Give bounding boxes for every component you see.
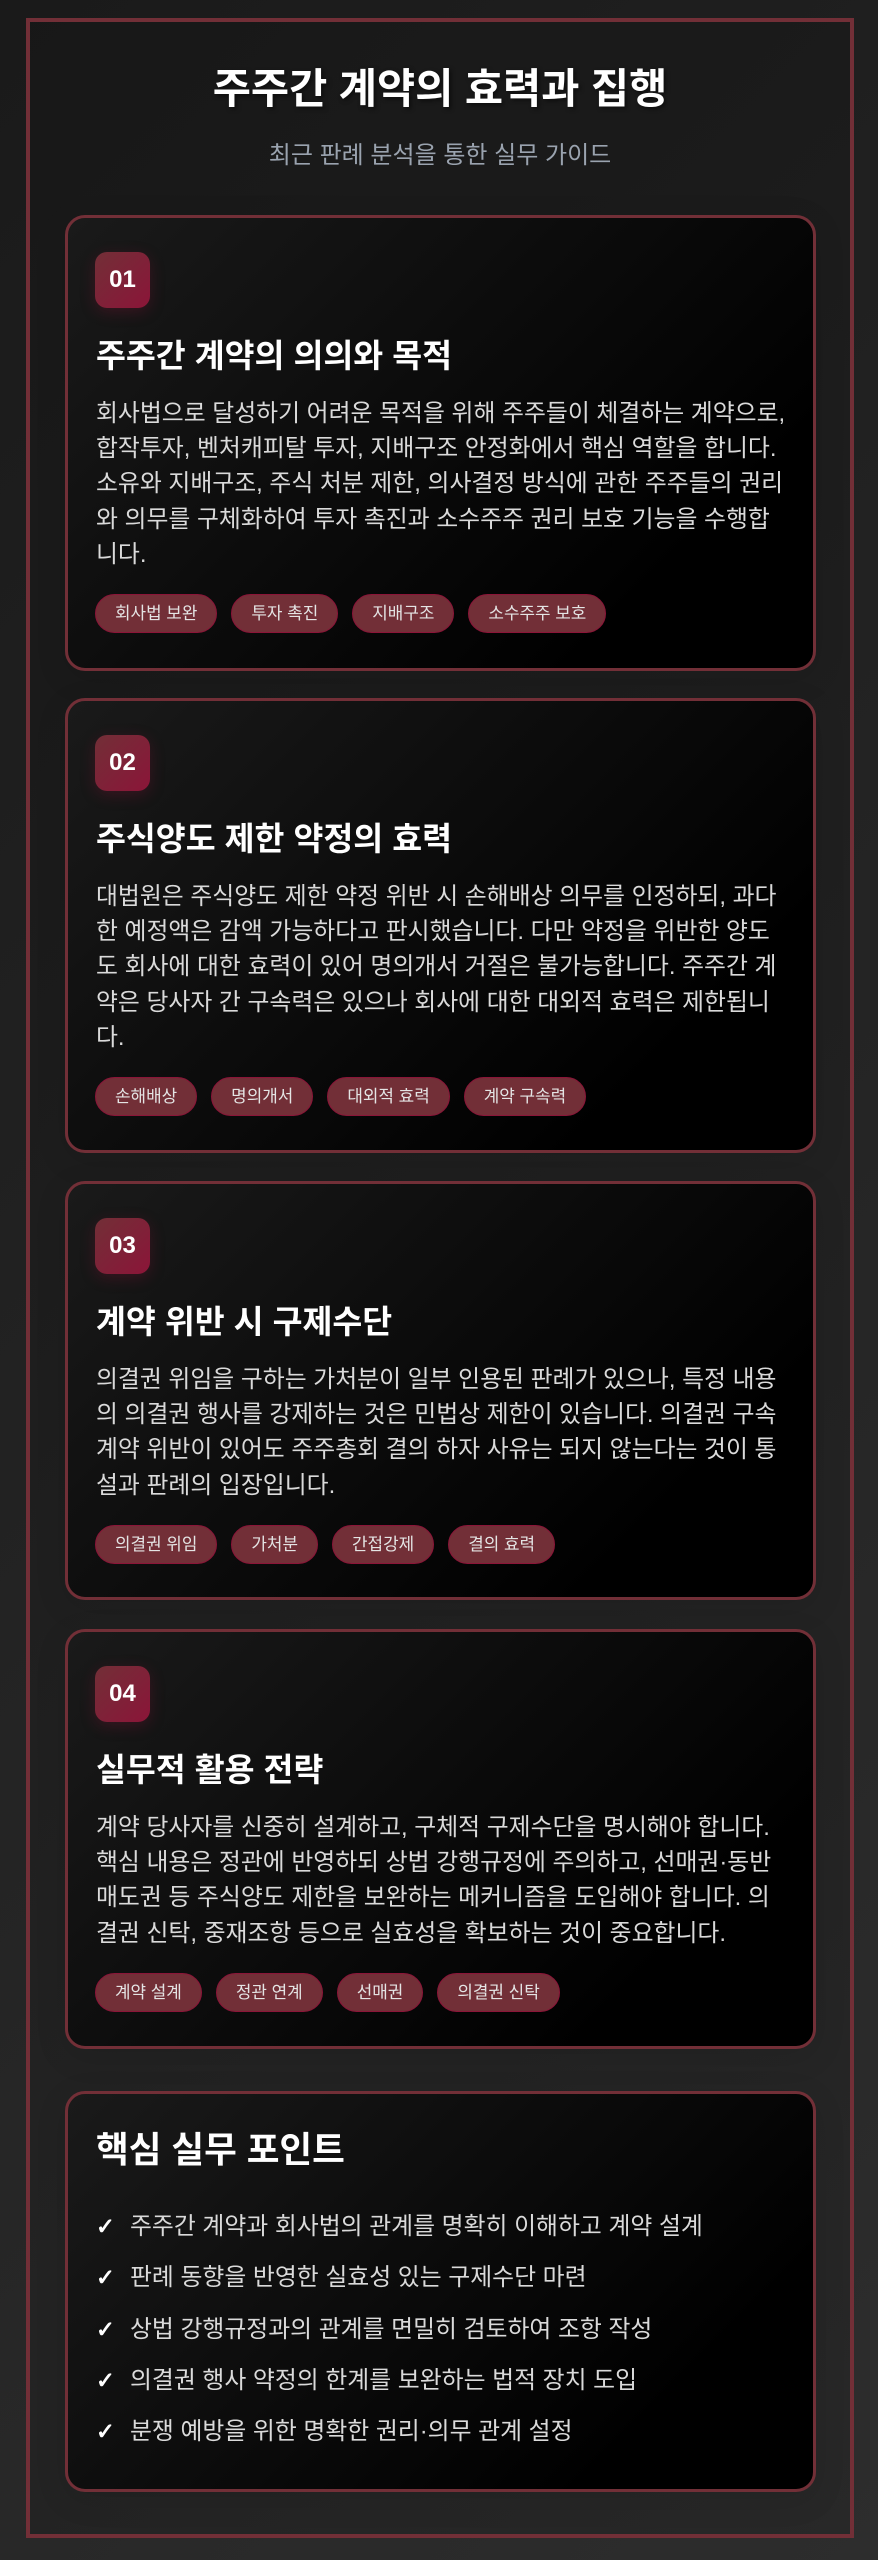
- badge 04: 04: [109, 1680, 136, 1707]
- tags 04: [95, 1973, 560, 2012]
- body text 02: 한 예정액은 감액 가능하다고 판시했습니다. 다만 약정을 위반한 양도: [96, 918, 770, 945]
- panel: section 03: [65, 1181, 816, 1600]
- tags 03: 의결권 위임: [115, 1535, 197, 1554]
- tags 03: 간접강제: [352, 1535, 414, 1554]
- tags 01: 투자 촉진: [251, 604, 318, 623]
- body text 03: 계약 위반이 있어도 주주총회 결의 하자 사유는 되지 않는다는 것이 통: [96, 1436, 776, 1463]
- body text 04: 계약 당사자를 신중히 설계하고, 구체적 구제수단을 명시해야 합니다.: [96, 1814, 770, 1841]
- body text 01: [96, 400, 785, 568]
- body text 04: 매도권 등 주식양도 제한을 보완하는 메커니즘을 도입해야 합니다. 의: [96, 1884, 770, 1911]
- body text 01: 소유와 지배구조, 주식 처분 제한, 의사결정 방식에 관한 주주들의 권리: [96, 470, 783, 497]
- tags 04: 선매권: [357, 1983, 403, 2002]
- body text 01: 와 의무를 구체화하여 투자 촉진과 소수주주 권리 보호 기능을 수행합: [96, 506, 770, 533]
- badge 02: 02: [109, 749, 136, 776]
- tags 01: 소수주주 보호: [488, 604, 586, 623]
- badge 04: [95, 1666, 150, 1722]
- tags 04: 계약 설계: [115, 1983, 182, 2002]
- checklist item 2: 판례 동향을 반영한 실효성 있는 구제수단 마련: [130, 2264, 587, 2291]
- heading 04: 실무적 활용 전략: [96, 1752, 323, 1788]
- tags 01: 회사법 보완: [115, 604, 197, 623]
- body text 02: 다.: [96, 1024, 125, 1051]
- checklist item 2: ✓: [96, 2267, 115, 2289]
- badge 01: [95, 252, 150, 308]
- checklist item 3: ✓: [96, 2319, 115, 2341]
- checklist item 1: ✓: [96, 2216, 115, 2238]
- panel: key practical points: [65, 2091, 816, 2492]
- badge 03: [95, 1218, 150, 1274]
- tags 03: 결의 효력: [468, 1535, 535, 1554]
- body text 02: 대법원은 주식양도 제한 약정 위반 시 손해배상 의무를 인정하되, 과다: [96, 883, 776, 910]
- body text 01: 니다.: [96, 541, 146, 568]
- tags 01: 지배구조: [372, 604, 434, 623]
- tags 01: [95, 594, 606, 633]
- tags 03: 가처분: [251, 1535, 298, 1554]
- tags 04: 의결권 신탁: [457, 1983, 540, 2002]
- panel: section 02: [65, 698, 816, 1153]
- body text 03: 의 의결권 행사를 강제하는 것은 민법상 제한이 있습니다. 의결권 구속: [96, 1401, 776, 1428]
- tags 02: 손해배상: [115, 1087, 177, 1106]
- checklist item 4: 의결권 행사 약정의 한계를 보완하는 법적 장치 도입: [130, 2367, 637, 2394]
- badge 02: [95, 735, 150, 791]
- subtitle: 최근 판례 분석을 통한 실무 가이드: [269, 142, 611, 169]
- panel: section 04: [65, 1629, 816, 2049]
- body text 04: 결권 신탁, 중재조항 등으로 실효성을 확보하는 것이 중요합니다.: [96, 1920, 726, 1947]
- heading 01: 주주간 계약의 의의와 목적: [96, 338, 452, 374]
- checklist item 5: 분쟁 예방을 위한 명확한 권리·의무 관계 설정: [130, 2418, 573, 2445]
- panel: section 01: [65, 215, 816, 671]
- tags 03: [95, 1525, 555, 1564]
- badge 01: 01: [109, 266, 136, 293]
- body text 03: [96, 1366, 776, 1499]
- heading 03: 계약 위반 시 구제수단: [96, 1304, 392, 1340]
- checklist item 4: ✓: [96, 2370, 115, 2392]
- tags 02: 계약 구속력: [484, 1087, 566, 1106]
- body text 01: 합작투자, 벤처캐피탈 투자, 지배구조 안정화에서 핵심 역할을 합니다.: [96, 435, 776, 462]
- checklist item 1: 주주간 계약과 회사법의 관계를 명확히 이해하고 계약 설계: [130, 2213, 703, 2240]
- body text 02: [96, 883, 776, 1051]
- tags 02: 대외적 효력: [347, 1087, 430, 1106]
- body text 03: 설과 판례의 입장입니다.: [96, 1472, 335, 1499]
- heading 02: 주식양도 제한 약정의 효력: [96, 821, 452, 857]
- body text 04: 핵심 내용은 정관에 반영하되 상법 강행규정에 주의하고, 선매권·동반: [96, 1849, 771, 1876]
- body text 02: 도 회사에 대한 효력이 있어 명의개서 거절은 불가능합니다. 주주간 계: [96, 953, 776, 980]
- body text 04: [96, 1814, 771, 1947]
- tags 02: [95, 1077, 586, 1116]
- badge 03: 03: [109, 1232, 136, 1259]
- heading: key points: 핵심 실무 포인트: [96, 2130, 345, 2170]
- tags 04: 정관 연계: [236, 1983, 303, 2002]
- checklist item 5: ✓: [96, 2421, 115, 2443]
- body text 03: 의결권 위임을 구하는 가처분이 일부 인용된 판례가 있으나, 특정 내용: [96, 1366, 776, 1393]
- body text 02: 약은 당사자 간 구속력은 있으나 회사에 대한 대외적 효력은 제한됩니: [96, 989, 770, 1016]
- checklist item 3: 상법 강행규정과의 관계를 면밀히 검토하여 조항 작성: [130, 2316, 652, 2343]
- tags 02: 명의개서: [231, 1087, 293, 1106]
- title: 주주간 계약의 효력과 집행: [213, 65, 667, 112]
- body text 01: 회사법으로 달성하기 어려운 목적을 위해 주주들이 체결하는 계약으로,: [96, 400, 785, 427]
